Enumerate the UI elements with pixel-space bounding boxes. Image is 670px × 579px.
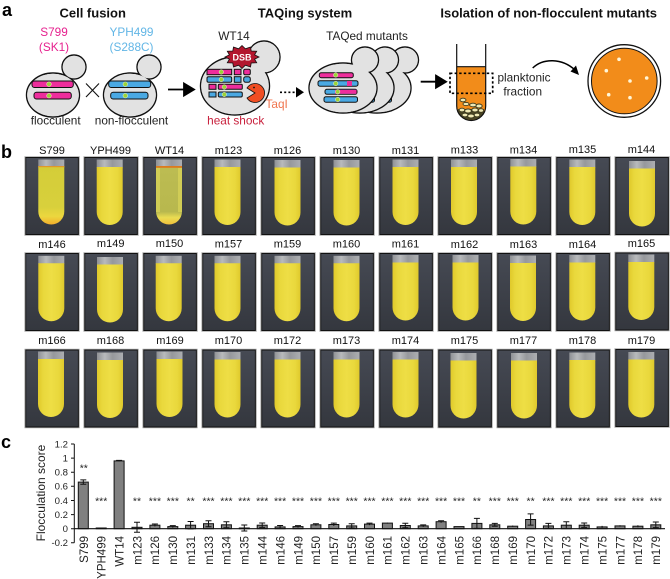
tube photo m134: m134 (510, 144, 537, 156)
y axis tick labels: 0.2 (55, 510, 68, 521)
tube photo YPH499 (84, 145, 138, 235)
significance asterisks: *** (596, 495, 608, 507)
significance asterisks: *** (95, 495, 107, 507)
tube photo m157 (202, 238, 256, 331)
tube photo m134 (497, 144, 551, 235)
label: planktonic fraction: fraction (503, 84, 542, 98)
y axis tick labels: -0.2 (51, 538, 68, 549)
curved arrow to plate (533, 61, 579, 75)
label: non-flocculent: non-flocculent (95, 114, 169, 128)
tube photo m172: m172 (274, 335, 301, 347)
x axis sample labels: m174 (580, 535, 592, 565)
label: flocculent: flocculent (31, 114, 81, 128)
significance asterisks: *** (220, 495, 233, 507)
tube photo m175 (438, 335, 492, 428)
tube photo m165 (615, 238, 669, 331)
tube photo m175: m175 (451, 335, 478, 347)
x axis sample labels: m146 (275, 536, 287, 565)
significance asterisks: *** (399, 495, 411, 507)
tube photo m126 (261, 145, 315, 235)
strain label S799 (SK1): S799 (40, 25, 68, 39)
tube photo m166 (25, 335, 79, 428)
tube photo m123 (202, 145, 256, 235)
label: TaqI: TaqI (266, 97, 288, 111)
x axis sample labels: m163 (418, 536, 430, 565)
label: WT14: WT14 (218, 29, 250, 43)
heading: cell fusion: Cell fusion (59, 6, 126, 20)
TAQed mutant cells stack (309, 47, 418, 113)
x axis sample labels: m133 (204, 536, 216, 565)
y axis tick labels: 0.4 (55, 496, 69, 507)
x axis sample labels: m135 (240, 536, 252, 565)
significance asterisks: *** (167, 495, 179, 507)
tube photo WT14: WT14 (155, 145, 184, 157)
x axis sample labels: m177 (615, 536, 627, 565)
x axis sample labels: m161 (383, 536, 395, 565)
tube photo S799: S799 (39, 145, 65, 157)
panel letter b: b (1, 142, 12, 162)
significance asterisks: *** (202, 495, 215, 507)
tube photo m149: m149 (97, 238, 124, 250)
significance asterisks: *** (578, 495, 590, 507)
tube photo m172 (261, 335, 315, 428)
y axis title: Flocculation score (34, 444, 48, 541)
WT14 cell with broken chromosomes (200, 41, 280, 115)
x axis (74, 528, 665, 530)
x axis sample labels: m170 (526, 536, 538, 565)
significance asterisks: *** (453, 495, 465, 507)
x axis sample labels: m173 (562, 536, 574, 565)
panel c: flocculation score bar chart (1, 432, 665, 579)
flocculent yeast cell (26, 55, 86, 117)
tube photo m174: m174 (392, 335, 419, 347)
x axis sample labels: m144 (258, 535, 270, 565)
tube photo WT14 (143, 145, 197, 235)
x axis sample labels: m131 (186, 536, 198, 565)
x axis sample labels: m168 (490, 536, 502, 565)
tube photo m173 (320, 335, 374, 428)
x axis sample labels: WT14 (114, 535, 126, 567)
x axis sample labels: m169 (508, 536, 520, 565)
x axis sample labels: m179 (651, 536, 663, 565)
significance asterisks: *** (381, 495, 394, 507)
panel letter c: c (1, 432, 11, 452)
tube photo m168: m168 (97, 335, 124, 347)
panel a: experimental scheme (2, 0, 661, 128)
significance asterisks: *** (614, 495, 626, 507)
x axis sample labels: m172 (544, 536, 556, 565)
x axis sample labels: m134 (222, 535, 234, 565)
significance asterisks: *** (292, 495, 304, 507)
x axis sample labels: m160 (365, 536, 377, 565)
tube photo m126: m126 (274, 145, 301, 157)
y axis with ticks (71, 444, 74, 543)
tube photo m162: m162 (451, 239, 478, 251)
tube photo m144 (615, 144, 669, 235)
tube photo m123: m123 (215, 145, 242, 157)
significance asterisks: *** (542, 495, 555, 507)
significance asterisks: *** (238, 495, 250, 507)
tube photo m133 (438, 144, 492, 235)
significance asterisks: *** (149, 495, 161, 507)
tube photo m159 (261, 238, 315, 331)
strain label YPH499 (S288C): YPH499 (110, 25, 153, 39)
dashed box: planktonic fraction (450, 73, 493, 93)
tube photo m161: m161 (392, 238, 419, 250)
label: heat shock: heat shock (207, 114, 264, 128)
significance asterisks: *** (256, 495, 268, 507)
tube photo S799 (25, 145, 79, 235)
x axis sample labels: m130 (168, 536, 180, 565)
strain label S799 (SK1): (SK1) (39, 40, 69, 54)
significance asterisks: *** (507, 495, 519, 507)
tube photo m168 (84, 335, 138, 428)
y axis tick labels: 1.2 (55, 440, 68, 450)
x axis sample labels: m159 (347, 536, 359, 565)
tube photo m165: m165 (628, 238, 655, 250)
x axis sample labels: m164 (436, 535, 448, 565)
significance asterisks: *** (560, 495, 572, 507)
tube photo m160: m160 (333, 238, 360, 250)
x axis sample labels: S799 (79, 536, 91, 563)
y axis tick labels: 0.8 (55, 468, 68, 479)
arrow: fusion to WT14 (168, 84, 194, 96)
significance asterisks (80, 462, 662, 507)
bars (78, 461, 661, 529)
tube photo m146: m146 (38, 239, 66, 251)
tube photo m166: m166 (38, 335, 66, 347)
x axis sample labels: m157 (329, 536, 341, 565)
significance asterisks: *** (632, 495, 644, 507)
x axis sample labels: m178 (633, 536, 645, 565)
tube photo m146 (25, 239, 79, 331)
tube photo m150 (143, 238, 197, 331)
tube photo m149 (84, 238, 138, 331)
x axis sample labels: m166 (472, 536, 484, 565)
tube photo m135 (556, 144, 610, 235)
x axis sample labels (79, 535, 663, 579)
significance asterisks: *** (489, 495, 501, 507)
tube photo m178: m178 (569, 335, 596, 347)
label: planktonic fraction: planktonic (497, 70, 551, 84)
tube photo m173: m173 (333, 335, 360, 347)
x axis sample labels: m175 (597, 536, 609, 565)
tube photo m163: m163 (510, 239, 537, 251)
tube photo m130 (320, 145, 374, 235)
significance asterisks: *** (310, 495, 322, 507)
significance asterisks: ** (133, 495, 141, 507)
tube photo m179 (615, 335, 669, 427)
heading: isolation of non-flocculent mutants: Isolation of non-flocculent mutants (440, 6, 657, 20)
significance asterisks: ** (527, 495, 535, 507)
significance asterisks: *** (346, 495, 358, 507)
tube photo m157: m157 (215, 238, 242, 250)
tube photo m164 (556, 239, 610, 331)
x axis sample labels: m123 (132, 536, 144, 565)
tube photo m164: m164 (569, 239, 596, 251)
tube photo m170: m170 (215, 335, 242, 347)
DSB burst icon: DSB (232, 52, 252, 62)
y axis tick labels: 0 (63, 524, 68, 535)
tube photo m150: m150 (156, 238, 183, 250)
x axis sample labels: m126 (150, 536, 162, 565)
tube photo m169: m169 (156, 335, 184, 347)
tube photo m177 (497, 335, 551, 428)
y axis tick labels (51, 440, 69, 549)
tube photo YPH499: YPH499 (90, 145, 131, 157)
x axis sample labels: m165 (454, 536, 466, 565)
error bars (80, 460, 659, 532)
tube photo m131 (379, 145, 433, 235)
tube photo m135: m135 (569, 144, 596, 156)
culture tube with sediment (457, 44, 486, 120)
panel letter a: a (2, 0, 13, 20)
significance asterisks: *** (417, 495, 429, 507)
cross symbol (86, 84, 99, 97)
significance asterisks: ** (80, 462, 88, 474)
y axis tick labels: 1 (63, 454, 68, 464)
tube photo m177: m177 (510, 335, 537, 347)
heading: TAQing system: TAQing system (258, 6, 352, 20)
significance asterisks: ** (473, 495, 481, 507)
x axis sample labels: m150 (311, 536, 323, 565)
tube photo m130: m130 (333, 145, 360, 157)
label: TAQed mutants: TAQed mutants (326, 29, 408, 43)
x axis sample labels: YPH499 (96, 536, 108, 579)
panel b: tube photographs (1, 142, 669, 428)
tube photo m179: m179 (628, 335, 655, 347)
tube photo m161 (379, 238, 433, 331)
significance asterisks: *** (274, 495, 286, 507)
petri dish with colonies (588, 45, 661, 117)
tube photo m178 (556, 335, 610, 428)
tube photo m174 (379, 335, 433, 428)
strain label YPH499 (S288C): (S288C) (110, 40, 154, 54)
significance asterisks: ** (187, 495, 195, 507)
arrow: mutants to culture tube (421, 76, 446, 88)
tube photo m160 (320, 238, 374, 331)
significance asterisks: *** (650, 495, 662, 507)
icon: TaqI pacman (247, 84, 265, 102)
significance asterisks: *** (328, 495, 340, 507)
significance asterisks: *** (363, 495, 376, 507)
tube photo m170 (202, 335, 256, 428)
x axis sample labels: m149 (293, 536, 305, 565)
tube photo m169 (143, 335, 197, 428)
non-flocculent yeast cell (104, 55, 161, 117)
tube photo m159: m159 (274, 238, 301, 250)
tube photo m162 (438, 239, 492, 331)
dotted arrow (280, 87, 304, 98)
tube photo m163 (497, 239, 551, 331)
tube photo m133: m133 (451, 144, 478, 156)
x axis sample labels: m162 (401, 536, 413, 565)
y axis tick labels: 0.6 (55, 482, 68, 493)
tube photo m144: m144 (628, 144, 655, 156)
significance asterisks: *** (435, 495, 447, 507)
DSB burst icon (225, 46, 259, 68)
tube photo m131: m131 (392, 145, 419, 157)
